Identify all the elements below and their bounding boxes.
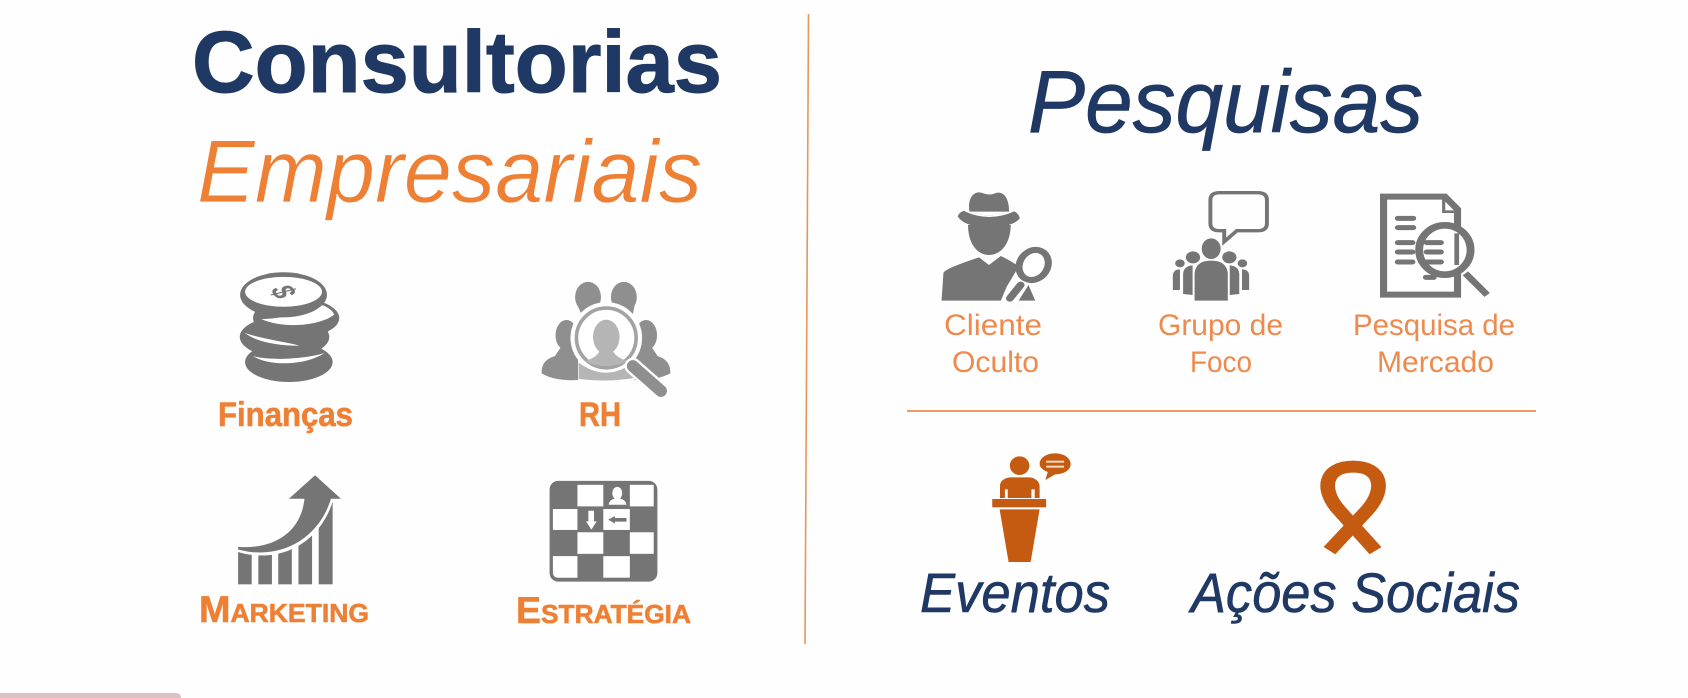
vertical divider	[805, 14, 808, 644]
icon: market research document	[1384, 197, 1487, 295]
label: Eventos: Eventos	[920, 561, 1110, 624]
icon: chess board	[550, 481, 657, 582]
icon: coins	[240, 272, 339, 382]
icon: coins: $	[263, 282, 304, 301]
icon: awareness ribbon	[1328, 467, 1379, 551]
label: RH: RH	[579, 396, 621, 434]
label: Grupo de Foco	[1158, 309, 1283, 379]
icon: growth chart with arrow	[236, 470, 341, 584]
label: Finanças: Finanças	[218, 396, 353, 434]
label: Grupo de Foco: Grupo de	[1158, 309, 1283, 342]
label: Pesquisa de Mercado: Mercado	[1377, 346, 1494, 379]
icon: mystery shopper	[942, 192, 1053, 301]
icon: speaker at podium	[992, 453, 1071, 562]
label: Estratégia: Estratégia	[516, 590, 691, 631]
panel: pesquisas	[907, 52, 1536, 624]
label: Marketing: Marketing	[199, 589, 369, 630]
bottom edge bar	[0, 693, 181, 698]
label: Cliente Oculto: Oculto	[952, 346, 1039, 379]
horizontal divider	[907, 410, 1536, 412]
icon: people search	[542, 282, 670, 391]
label: Ações Sociais: Ações Sociais	[1188, 561, 1520, 624]
icon: focus group	[1173, 193, 1267, 301]
label: Pesquisa de Mercado	[1353, 309, 1515, 379]
subtitle: Empresariais: Empresariais	[197, 121, 702, 221]
label: Grupo de Foco: Foco	[1190, 346, 1252, 379]
label: Pesquisa de Mercado: Pesquisa de	[1353, 309, 1515, 342]
title: Pesquisas: Pesquisas	[1028, 52, 1423, 151]
label: Cliente Oculto	[944, 309, 1042, 379]
title: Consultorias: Consultorias	[192, 14, 722, 111]
panel: consultorias empresariais	[192, 14, 722, 631]
label: Cliente Oculto: Cliente	[944, 309, 1042, 342]
